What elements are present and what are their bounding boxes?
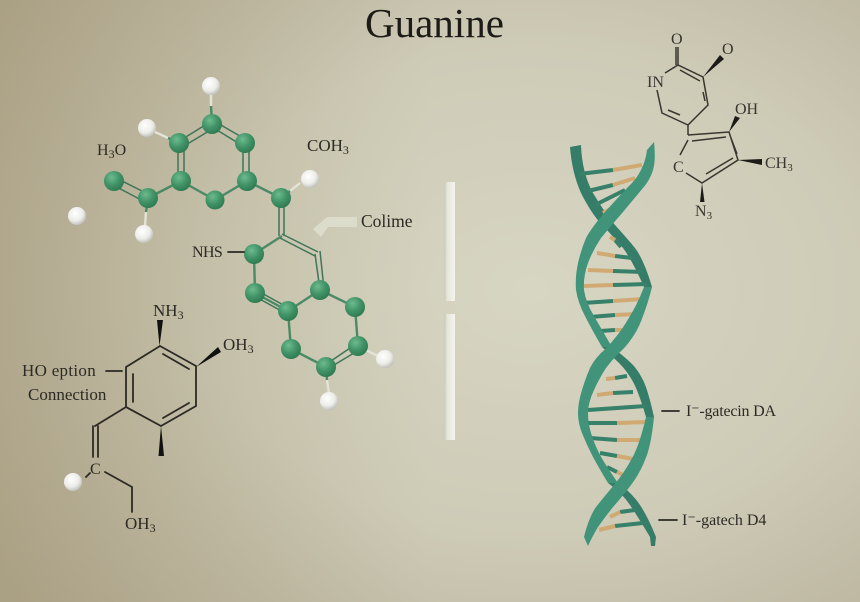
back ribbon segments <box>570 145 656 546</box>
ball-and-stick molecule <box>68 77 394 410</box>
NH3: NH <box>153 301 178 320</box>
HO eption: HO eption <box>22 361 96 380</box>
label tick <box>106 370 122 372</box>
DNA label 2: I⁻-gatech D4 <box>682 512 766 529</box>
line structure: upper right: IN <box>647 74 664 91</box>
C: C <box>90 461 101 478</box>
line structure: upper right: C <box>673 159 684 176</box>
bonds <box>657 47 738 183</box>
OH3 lower: OH <box>125 514 150 533</box>
OH3: OH <box>223 335 248 354</box>
front ribbon segments <box>576 142 655 546</box>
label: COH3: 3 <box>343 143 349 157</box>
line structure: upper right <box>647 31 793 222</box>
title: Guanine <box>365 0 504 46</box>
label: H3O: 3 <box>109 147 115 161</box>
ring bonds <box>86 346 196 512</box>
divider <box>444 182 455 440</box>
line structure: upper right: O <box>671 31 683 48</box>
label: COH3: COH <box>307 136 343 155</box>
line structure: upper right: N <box>695 203 707 220</box>
line structure: upper right: 3 <box>707 210 713 222</box>
NH3: 3 <box>178 308 184 322</box>
label: NHS with tick <box>192 244 244 261</box>
OH3 lower: 3 <box>150 521 156 535</box>
molecule bonds <box>113 92 378 394</box>
white atom <box>64 473 82 491</box>
label: H3O: H <box>97 142 109 159</box>
base-pair rungs <box>579 165 649 530</box>
line structure: upper right: 3 <box>787 162 793 174</box>
line structure: upper right: OH <box>735 101 759 118</box>
wedge bonds <box>157 320 221 456</box>
white hydrogen atoms <box>68 77 394 410</box>
label: Colime: Colime <box>361 211 413 231</box>
DNA label 1: I⁻-gatecin DA <box>686 403 776 420</box>
line structure: upper right: O <box>722 41 734 58</box>
green atoms <box>104 114 368 377</box>
callout arrow <box>313 217 357 237</box>
DNA double helix <box>570 142 656 546</box>
OH3: 3 <box>248 342 254 356</box>
label: H3O: O <box>115 142 126 159</box>
Connection: Connection <box>28 385 107 404</box>
line structure: lower left <box>22 301 254 535</box>
label: NHS with tick: NHS <box>192 244 222 261</box>
wedges <box>700 55 762 202</box>
line structure: upper right: CH <box>765 155 787 172</box>
